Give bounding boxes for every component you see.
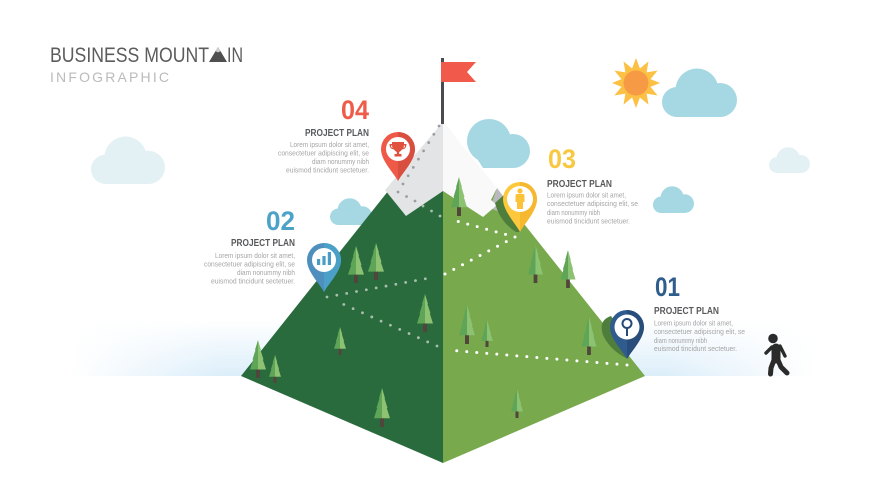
text block 04: consectetuer adipiscing elit, se — [278, 148, 369, 158]
pin shadow: 01 — [602, 316, 627, 358]
text block 02 — [204, 206, 295, 286]
cloud: pale right — [769, 147, 810, 173]
icon: sun — [612, 58, 660, 108]
text block 01: diam nonummy nibh — [654, 336, 707, 345]
mountain — [241, 122, 645, 463]
mountain right face — [443, 122, 645, 463]
icon: title mountain — [209, 47, 227, 62]
pin 04: trophy — [381, 132, 415, 181]
icon: bar chart — [317, 252, 331, 265]
title — [50, 44, 243, 85]
dotted trail — [327, 126, 627, 365]
cloud: left of peak — [330, 198, 372, 225]
text block 03: consectetuer adipiscing elit, se — [547, 199, 638, 208]
text block 04 — [278, 95, 369, 174]
snow cap right — [443, 122, 497, 217]
text block 01 — [654, 272, 745, 353]
pin shadow: 03 — [495, 194, 520, 232]
cloud: behind peak — [467, 119, 530, 168]
text block 01: Lorem ipsum dolor sit amet, — [654, 318, 733, 328]
text block 02: 02 — [266, 206, 295, 236]
text block 02: PROJECT PLAN — [231, 238, 295, 249]
pin 01: magnifier — [610, 310, 644, 359]
text block 02: euismod tincidunt sectetuer. — [211, 276, 295, 286]
icon: person — [516, 188, 524, 209]
title: BUSINESS MOUNT — [50, 44, 209, 67]
icon: walking person — [766, 334, 787, 374]
trees — [250, 177, 596, 427]
pin 03: person — [503, 182, 537, 232]
text block 01: euismod tincidunt sectetuer. — [654, 344, 737, 353]
text block 02: diam nonummy nibh — [237, 268, 295, 277]
text block 01: PROJECT PLAN — [654, 306, 719, 317]
text block 04: Lorem ipsum dolor sit amet, — [290, 140, 369, 149]
icon: magnifier — [622, 319, 632, 336]
text block 04: 04 — [341, 95, 369, 125]
pin 02: bars — [307, 243, 341, 292]
text block 04: euismod tincidunt sectetuer. — [286, 166, 369, 174]
mountain left face — [241, 122, 443, 463]
cloud: large right — [662, 68, 737, 117]
text block 01: consectetuer adipiscing elit, se — [654, 327, 745, 336]
text block 02: Lorem ipsum dolor sit amet, — [215, 251, 295, 260]
horizon sky glow — [105, 334, 780, 376]
text block 03: euismod tincidunt sectetuer. — [547, 216, 630, 226]
title: IN — [227, 44, 243, 67]
snow cap left — [385, 122, 443, 216]
grey rock — [490, 188, 506, 212]
cloud: pale left — [91, 136, 165, 184]
cloud: small right — [653, 186, 694, 213]
text block 04: PROJECT PLAN — [305, 128, 369, 139]
text block 03: 03 — [548, 144, 576, 174]
text block 02: consectetuer adipiscing elit, se — [204, 260, 295, 268]
text block 03: diam nonummy nibh — [547, 208, 600, 217]
icon: trophy — [390, 142, 406, 156]
text block 04: diam nonummy nibh — [312, 157, 369, 166]
title: INFOGRAPHIC — [50, 69, 169, 85]
text block 01: 01 — [655, 272, 680, 302]
text block 03 — [547, 144, 638, 226]
text block 03: PROJECT PLAN — [547, 179, 612, 190]
flag — [441, 58, 476, 124]
text block 03: Lorem ipsum dolor sit amet, — [547, 190, 626, 200]
